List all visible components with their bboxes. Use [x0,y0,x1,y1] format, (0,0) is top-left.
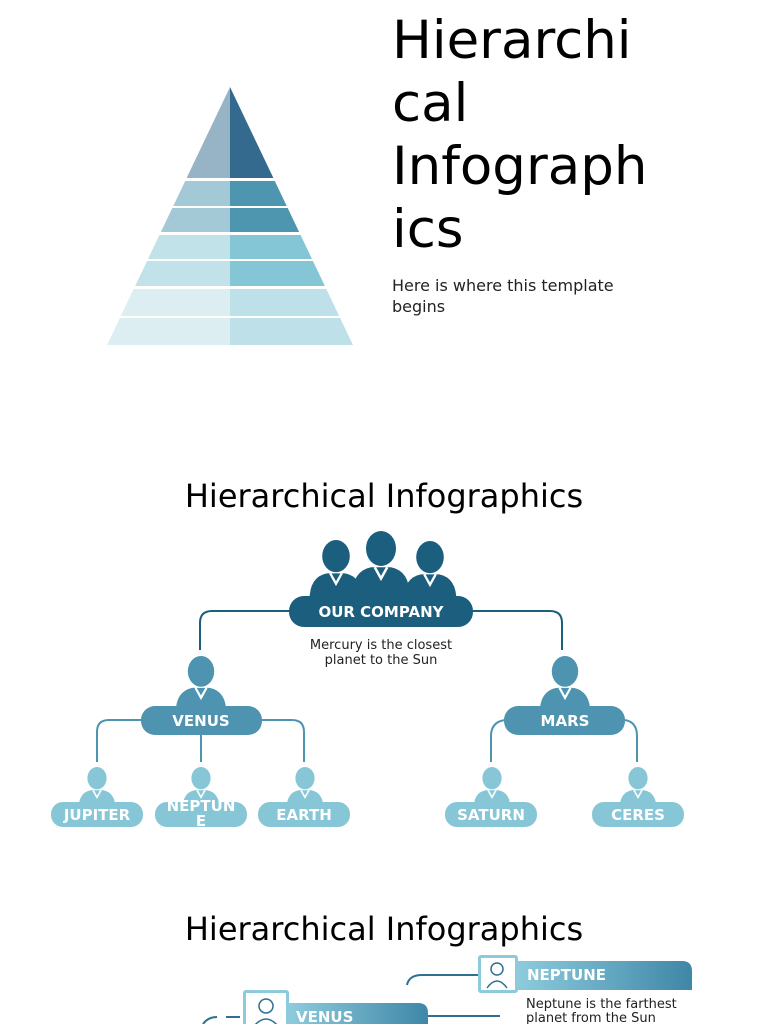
small pills [51,797,684,830]
small pills: CERES [611,806,665,824]
title: ics [392,199,463,260]
org chart [51,531,684,830]
subtitle: Here is where this template begins [392,276,614,316]
title: Hierarchi [392,10,632,71]
section heading 2: Hierarchical Infographics [185,910,583,948]
title: cal [392,73,468,134]
pills: venus mars: MARS [541,712,589,730]
small pills: JUPITER [63,806,131,824]
neptune card [478,955,692,993]
caption: Mercury is the closest [310,638,452,653]
caption [310,638,452,668]
small pills: E [196,812,206,830]
bottom chart [202,955,692,1024]
neptune text: Neptune is the farthest [526,997,677,1012]
venus card [243,990,428,1028]
icon: company people [310,531,456,601]
small pills: SATURN [457,806,525,824]
neptune text [526,997,677,1026]
icon: venus mars persons [176,656,590,713]
pill: our company: OUR COMPANY [318,603,445,621]
small pills: EARTH [276,806,332,824]
neptune card: NEPTUNE [527,966,606,984]
section heading 1: Hierarchical Infographics [185,477,583,515]
small pills: NEPTUN [167,797,235,815]
small people [79,767,656,809]
title [392,10,647,260]
pills: venus mars: VENUS [172,712,230,730]
pill: our company [289,596,473,627]
caption: planet to the Sun [325,653,437,668]
pills: venus mars [141,706,625,735]
title: Infograph [392,136,647,197]
pyramid [107,87,353,345]
